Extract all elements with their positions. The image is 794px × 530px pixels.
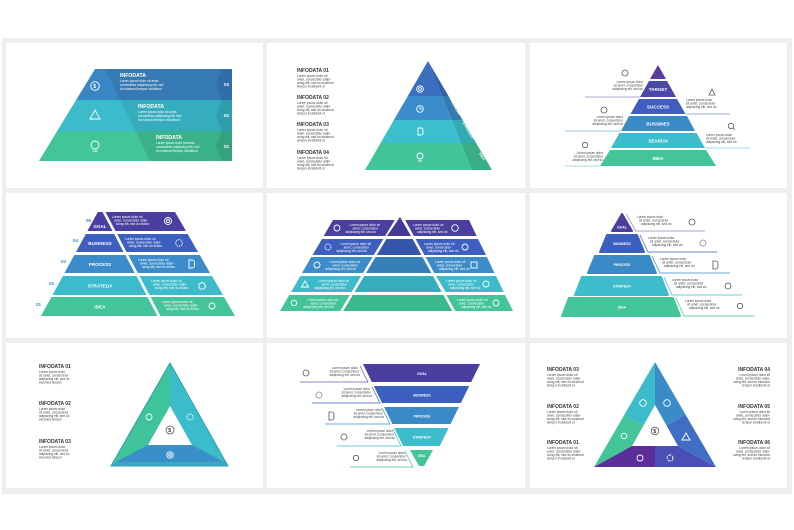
callouts: Lorem ipsum dolor [617,80,644,84]
funnel business: adipiscing elit, sed do [342,394,372,398]
layer 01: consectetur adipiscing elit, sed [156,145,200,149]
right text blocks: tempor incididunt ut [742,420,770,424]
row 4: Lorem ipsum dolor sit [319,279,349,283]
layer 02: 02 [224,113,230,118]
text blocks: eiusmod tempor [39,418,63,422]
text blocks left: Lorem ipsum dolor sit [297,156,328,160]
strategy step: STRATEGY [613,284,632,288]
text blocks: Lorem ipsum dolor [39,370,66,374]
pyramid layers: TARGET [649,87,667,92]
layer 02: INFODATA [138,104,164,110]
row 2: Lorem ipsum dolor sit [341,242,371,246]
panel: card 8 inverted funnel [267,343,525,488]
left text blocks: INFODATA 01 [547,440,579,446]
right text blocks: tempor incididunt ut [742,384,770,388]
row 2: adipiscing elit, sed do [428,249,459,253]
layer business: 04 [73,238,79,243]
business step [600,235,717,252]
row 4: adipiscing elit, sed do [315,286,345,290]
callouts: adipiscing elit, sed do [686,105,717,109]
layer business: BUSINESS [88,241,112,246]
process step: Lorem ipsum dolor [660,257,687,261]
text blocks left: tempor incididunt ut [297,166,325,170]
text blocks [39,364,71,460]
text blocks: Lorem ipsum dolor [39,407,66,411]
text blocks: INFODATA 01 [39,364,71,370]
triangle: $ [168,428,171,434]
left text blocks: scing elit, sed do eiusmod [547,380,584,384]
panel: card 4 split pyramid with numbers [6,193,263,338]
panel: card 3 stepped pyramid with callouts [530,43,787,188]
row 1: amet, consectetur [353,226,379,230]
funnel business: BUSINESS [413,394,431,398]
left text blocks: tempor incididunt ut [547,420,575,424]
idea step: Lorem ipsum dolor [685,299,712,303]
pyramid layers: IDEA [653,156,664,161]
layer strategy: STRATEGY [88,284,112,288]
layer strategy [49,276,223,295]
layer strategy: Lorem ipsum dolor sit [151,279,182,283]
text blocks left: Lorem ipsum dolor sit [297,101,328,105]
left text blocks: scing elit, sed do eiusmod [547,453,584,457]
triangle [111,363,228,466]
funnel process: PROCESS [414,414,431,418]
layer idea: 01 [36,302,42,307]
layer goal: 05 [86,218,92,223]
pyramid layers [600,65,716,166]
funnel goal: adipiscing elit, sed do [330,373,360,377]
panel: card 9 six-segment triangle [530,343,787,488]
triangle chart: PROCESS [449,98,461,116]
row 5: Lorem ipsum dolor sit [308,298,338,302]
right text blocks: Lorem ipsum dolor sit [740,446,770,450]
panel: card 1 three-layer trapezoid [6,43,263,188]
triangle chart [365,61,492,170]
callouts [565,70,750,166]
layer process: PROCESS [89,262,111,267]
layer 01 [39,131,232,161]
callouts: sit amet, consectetur [594,118,624,122]
layer 03: consectetur adipiscing elit, sed [120,83,164,87]
row 1: Lorem ipsum dolor sit [413,223,444,227]
row 4: Lorem ipsum dolor sit [446,279,477,283]
text blocks left: amet, consectetur adipi- [297,78,331,82]
row 4: adipiscing elit, sed do [450,286,481,290]
text blocks left: INFODATA 04 [297,150,329,156]
funnel business [312,386,469,403]
goal step: sit amet, consectetur [639,218,669,222]
pyramid layers: SUCCESS [647,104,669,110]
text blocks left: scing elit, sed do eiusmod [297,81,334,85]
funnel process: sit amet, consectetur [354,412,384,416]
right text blocks: amet, consectetur adipi- [736,414,770,418]
callouts: adipiscing elit, sed do [613,87,643,91]
funnel strategy: adipiscing elit, sed do [365,436,395,440]
layer business: scing elit, sed do eiusm. [129,244,163,248]
row 3: adipiscing elit, sed do [439,267,470,271]
right text blocks: Lorem ipsum dolor sit [740,410,770,414]
text blocks: adipiscing elit, sed do [39,377,70,381]
callouts: Lorem ipsum dolor [706,133,733,137]
layer idea: Lorem ipsum dolor sit [162,300,193,304]
funnel idea: Lorem ipsum dolor [379,451,406,455]
right text blocks: Lorem ipsum dolor sit [740,373,770,377]
layer business [73,234,198,252]
funnel business: Lorem ipsum dolor [344,387,371,391]
row 1: amet, consectetur [415,226,441,230]
strategy step: adipiscing elit, sed do [676,285,707,289]
funnel idea: sit amet, consectetur [377,454,407,458]
callouts: Lorem ipsum dolor [597,115,624,119]
layer strategy: amet, consectetur adipi- [153,282,187,286]
callouts: sit amet, consectetur [574,154,604,158]
idea step: sit amet, consectetur [687,302,717,306]
right text blocks: amet, consectetur adipi- [736,450,770,454]
idea step [562,298,755,316]
left text blocks: scing elit, sed do eiusmod [547,417,584,421]
funnel process [325,407,459,424]
layer 01: INFODATA [156,135,182,141]
layer goal: amet, consectetur adipi- [114,218,148,222]
layer 01: Lorem ipsum dolor sit amet, [156,141,195,145]
layer idea [36,297,235,316]
funnel business: sit amet, consectetur [342,390,372,394]
process step: PROCESS [614,263,631,267]
funnel idea: IDEA [418,454,426,458]
layer 02 [57,100,232,131]
left text blocks: amet, consectetur adipi- [547,450,581,454]
layer 02: Lorem ipsum dolor sit amet, [138,110,177,114]
goal step [612,214,705,231]
layer strategy: 02 [49,281,55,286]
funnel strategy: STRATEGY [413,436,432,440]
panel: card 5 double pyramid [267,193,525,338]
layer goal [86,212,186,231]
panel: card 7 hollow triangle [6,343,263,488]
strategy step [575,277,742,295]
text blocks: INFODATA 02 [39,401,71,407]
row 3: Lorem ipsum dolor sit [330,260,360,264]
layer business: amet, consectetur adipi- [127,240,161,244]
text blocks left: scing elit, sed do eiusmod [297,135,334,139]
layer 02: consectetur adipiscing elit, sed [138,114,182,118]
text blocks: adipiscing elit, sed do [39,414,70,418]
layer process: scing elit, sed do eiusm. [142,265,176,269]
text blocks left: amet, consectetur adipi- [297,104,331,108]
row 3 [302,257,494,273]
layer 03: do eiusmod tempor incididunt [120,87,162,91]
goal step: adipiscing elit, sed do [641,222,672,226]
text blocks left: scing elit, sed do eiusmod [297,163,334,167]
layer strategy: scing elit, sed do eiusm. [155,286,189,290]
right text blocks: scing elit, sed do eiusmod [733,380,770,384]
layer goal: scing elit, sed do eiusm. [116,222,150,226]
row 5: amet, consectetur [459,302,485,306]
text blocks: adipiscing elit, sed do [39,452,70,456]
callouts: sit amet, consectetur [614,84,644,88]
text blocks left: Lorem ipsum dolor sit [297,74,328,78]
funnel idea: adipiscing elit, sed do [377,458,407,462]
layer business: Lorem ipsum dolor sit [125,237,156,241]
text blocks left: Lorem ipsum dolor sit [297,128,328,132]
row 5 [280,295,513,311]
panel: card 2 triangle with side strip [267,43,525,188]
funnel strategy: sit amet, consectetur [365,432,395,436]
row 4: amet, consectetur [322,282,348,286]
layer 03: $ [93,84,96,90]
text blocks left: INFODATA 03 [297,122,329,128]
text blocks left: amet, consectetur adipi- [297,132,331,136]
text blocks left: amet, consectetur adipi- [297,160,331,164]
left text blocks: Lorem ipsum dolor sit [547,373,578,377]
text blocks: sit amet, consectetur [39,374,69,378]
callouts: Lorem ipsum dolor [686,98,713,102]
row 2: amet, consectetur [344,246,370,250]
right text blocks: INFODATA 04 [738,367,770,373]
left text blocks: tempor incididunt ut [547,384,575,388]
row 5: adipiscing elit, sed do [304,305,334,309]
triangle chart: GOAL [438,72,447,84]
left text blocks: amet, consectetur adipi- [547,376,581,380]
right text blocks: tempor incididunt ut [742,456,770,460]
left text blocks: Lorem ipsum dolor sit [547,410,578,414]
pyramid layers: SEARCH [648,138,668,144]
layer idea: scing elit, sed do eiusm. [166,307,200,311]
funnel goal: GOAL [417,372,427,376]
text blocks: sit amet, consectetur [39,410,69,414]
funnel process: adipiscing elit, sed do [354,415,384,419]
business step: adipiscing elit, sed do [652,243,683,247]
row 2: Lorem ipsum dolor sit [424,242,455,246]
business step: BUSINESS [613,242,631,246]
layer 02: do eiusmod tempor incididunt [138,118,180,122]
row 1: adipiscing elit, sed do [346,230,376,234]
callouts: adipiscing elit, sed do [593,122,623,126]
business step: Lorem ipsum dolor [648,236,675,240]
text blocks left: tempor incididunt ut [297,84,325,88]
text blocks left: tempor incididunt ut [297,112,325,116]
row 4: amet, consectetur [448,282,474,286]
layer process [61,255,210,273]
right text blocks: INFODATA 06 [738,440,770,446]
process step: adipiscing elit, sed do [664,264,695,268]
right text blocks: INFODATA 05 [738,404,770,410]
layer idea: IDEA [95,304,106,310]
callouts: Lorem ipsum dolor [577,151,604,155]
text blocks left: INFODATA 02 [297,95,329,101]
callouts: sit amet, consectetur [686,102,716,106]
row 1: adipiscing elit, sed do [417,230,448,234]
row 1: Lorem ipsum dolor sit [350,223,380,227]
process step: sit amet, consectetur [662,260,692,264]
layer 03: 03 [224,82,230,87]
layer process: 03 [61,259,67,264]
text blocks left: scing elit, sed do eiusmod [297,108,334,112]
right text blocks: scing elit, sed do eiusmod [733,453,770,457]
callouts: adipiscing elit, sed do [706,140,737,144]
text blocks left [297,68,334,170]
callouts: sit amet, consectetur [706,136,736,140]
text blocks left: INFODATA 01 [297,68,329,74]
strategy step: Lorem ipsum dolor [672,278,699,282]
callouts: adipiscing elit, sed do [573,158,603,162]
row 5: adipiscing elit, sed do [461,305,492,309]
goal step: Lorem ipsum dolor [637,215,664,219]
triangle segments [594,362,716,467]
left text blocks: INFODATA 02 [547,404,579,410]
right text blocks [733,367,770,460]
row 3: amet, consectetur [333,264,359,268]
left text blocks: amet, consectetur adipi- [547,414,581,418]
funnel strategy [337,428,449,446]
row 2: adipiscing elit, sed do [337,249,367,253]
text blocks left: tempor incididunt ut [297,138,325,142]
strategy step: sit amet, consectetur [674,282,704,286]
layer 03: Lorem ipsum dolor sit amet, [120,79,159,83]
idea step: IDEA [618,306,627,310]
left text blocks [547,367,584,460]
funnel goal [300,364,480,382]
layer goal: Lorem ipsum dolor sit [112,215,143,219]
triangle segments: $ [653,429,656,435]
funnel goal: sit amet, consectetur [330,370,360,374]
layer 01: do eiusmod tempor incididunt [156,149,198,153]
panel: card 6 rounded stepped pyramid [530,193,787,338]
text blocks: Lorem ipsum dolor [39,445,66,449]
triangle chart: IDEA [478,152,486,162]
funnel strategy: Lorem ipsum dolor [367,429,394,433]
triangle chart: STRATEGY [461,121,475,140]
row 5: Lorem ipsum dolor sit [457,298,488,302]
row 2 [312,239,486,255]
text blocks: eiusmod tempor [39,380,63,384]
goal step: GOAL [617,226,627,230]
left text blocks: Lorem ipsum dolor sit [547,446,578,450]
pyramid layers: BUSSINES [646,122,670,126]
layer process: amet, consectetur adipi- [140,262,174,266]
text blocks: eiusmod tempor [39,456,63,460]
process step [588,256,730,273]
right text blocks: amet, consectetur adipi- [736,376,770,380]
row 2: amet, consectetur [426,246,452,250]
funnel goal: Lorem ipsum dolor [332,366,359,370]
right text blocks: scing elit, sed do eiusmod [733,417,770,421]
funnel idea [350,450,433,467]
business step: sit amet, consectetur [650,240,680,244]
row 4 [291,276,504,292]
funnel process: Lorem ipsum dolor [356,408,383,412]
layer idea: amet, consectetur adipi- [164,304,198,308]
layer 03: INFODATA [120,73,146,79]
layer 01: 01 [224,144,230,149]
left text blocks: INFODATA 03 [547,367,579,373]
layer 03 [76,69,232,100]
row 1 [324,217,477,236]
text blocks: sit amet, consectetur [39,448,69,452]
row 3: Lorem ipsum dolor sit [435,260,466,264]
row 5: amet, consectetur [311,302,337,306]
text blocks: INFODATA 03 [39,439,71,445]
row 3: adipiscing elit, sed do [326,267,356,271]
layer goal: GOAL [93,224,107,229]
left text blocks: tempor incididunt ut [547,456,575,460]
row 3: amet, consectetur [437,264,463,268]
idea step: adipiscing elit, sed do [689,306,720,310]
layer process: Lorem ipsum dolor sit [138,258,169,262]
